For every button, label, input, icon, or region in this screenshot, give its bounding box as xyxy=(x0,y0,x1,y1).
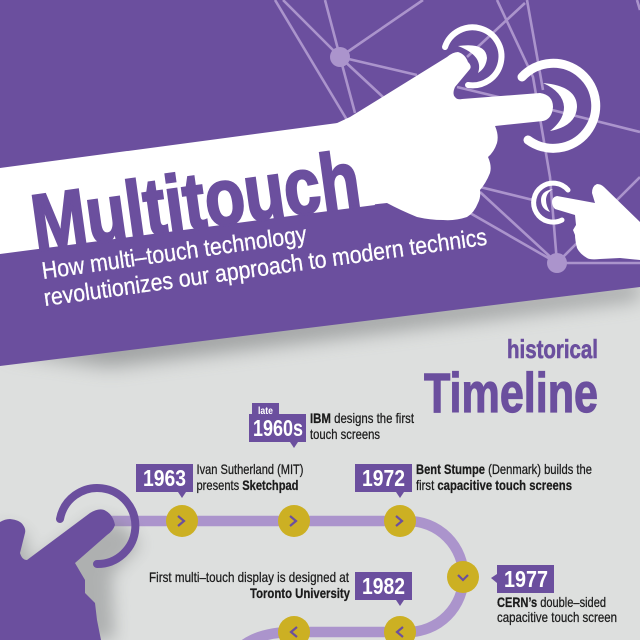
event: late 1960s: 1960s xyxy=(253,415,303,441)
event: 1977: 1977 xyxy=(504,566,548,592)
event: 1982: First multi–touch display is designed at xyxy=(149,569,349,585)
event: late 1960s xyxy=(249,403,414,448)
hand shadow xyxy=(0,517,140,640)
event: late 1960s: late xyxy=(258,406,273,417)
event: 1972: Bent Stumpe (Denmark) builds the xyxy=(416,461,592,477)
event: 1972: first capacitive touch screens xyxy=(416,477,572,493)
event: 1977: CERN’s double–sided xyxy=(497,594,606,610)
heading: historical timeline: historical xyxy=(507,334,598,364)
icon: purple touch ring xyxy=(60,488,135,564)
event: 1963: 1963 xyxy=(143,465,186,491)
event: late 1960s: IBM designs the first xyxy=(310,410,414,426)
header shadow xyxy=(0,282,640,366)
event: 1977 xyxy=(491,565,617,625)
event: 1982 xyxy=(149,569,412,606)
title: Multitouch xyxy=(26,134,365,268)
event: 1963: presents Sketchpad xyxy=(196,477,298,493)
icon: top touch rings xyxy=(445,27,501,85)
timeline path xyxy=(110,521,464,640)
icon: large pointing hand xyxy=(335,52,553,220)
icon: purple touching hand xyxy=(0,509,115,640)
event: 1972 xyxy=(355,461,592,498)
icon: small pointing hand xyxy=(552,184,640,260)
subtitle: How multi–touch technology xyxy=(40,221,308,285)
network node: upper xyxy=(330,47,350,67)
event: 1982: Toronto University xyxy=(250,585,350,601)
event: 1977: capacitive touch screen xyxy=(497,609,617,625)
network node: lower xyxy=(547,253,567,273)
event: 1963 xyxy=(136,461,304,498)
icon: small touch rings xyxy=(534,183,568,222)
timeline markers xyxy=(166,505,479,640)
panel: purple header xyxy=(0,0,640,366)
heading: historical timeline xyxy=(424,334,598,424)
white title band xyxy=(0,122,375,254)
icon: large touch rings xyxy=(522,63,596,148)
event: 1982: 1982 xyxy=(362,573,405,599)
event: late 1960s: touch screens xyxy=(310,426,380,442)
event: 1963: Ivan Sutherland (MIT) xyxy=(196,461,304,477)
event: 1972: 1972 xyxy=(362,465,405,491)
subtitle: revolutionizes our approach to modern technics xyxy=(42,224,489,312)
network lines xyxy=(275,0,640,263)
